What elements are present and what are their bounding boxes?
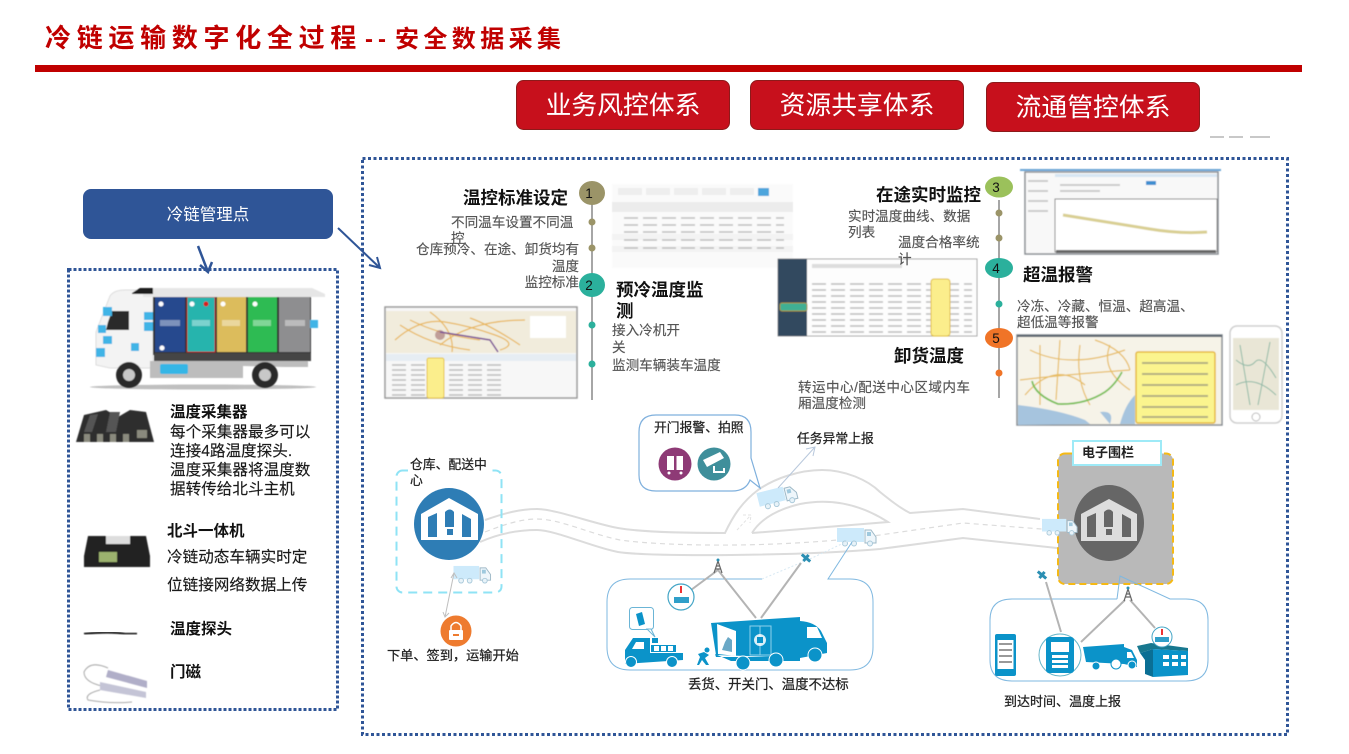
zone: electronic fence bbox=[1042, 441, 1173, 584]
step 1 text: 监控标准 bbox=[525, 275, 579, 290]
icon: truck on main road bbox=[837, 528, 876, 546]
step 3 text: 温度合格率统 bbox=[898, 234, 980, 250]
icon: pickup with phone bubble bbox=[625, 608, 683, 668]
icon: warehouse blue bbox=[414, 488, 484, 560]
text: 温度采集器: 温度采集器将温度数 bbox=[170, 461, 311, 479]
button: 资源共享体系: 资源共享体系 bbox=[780, 91, 934, 120]
button: 资源共享体系 bbox=[750, 80, 964, 130]
step 1 text: 温度 bbox=[552, 259, 579, 274]
icon: warehouse grey bbox=[1074, 485, 1144, 561]
title: -- bbox=[365, 26, 391, 53]
icon: truck arriving bbox=[1042, 519, 1077, 535]
step 3 marker: 3 bbox=[992, 180, 1000, 195]
step 3 text: 在途实时监控 bbox=[876, 185, 981, 205]
step 4 text: 冷冻、冷藏、恒温、超高温、 bbox=[1017, 298, 1194, 314]
screenshot: temperature curve bbox=[1020, 169, 1221, 254]
system buttons bbox=[516, 80, 1200, 132]
step 2 text: 测 bbox=[616, 301, 634, 321]
icon: door bbox=[658, 448, 692, 480]
refrigerated truck illustration bbox=[90, 288, 325, 390]
text: 北斗一体机: 北斗一体机 bbox=[167, 522, 245, 540]
label: warehouse: 仓库、配送中 bbox=[410, 457, 487, 472]
icon: satellite bbox=[799, 551, 813, 565]
label: callout caption: 丢货、开关门、温度不达标 bbox=[688, 676, 849, 692]
callout: door alarm bbox=[639, 415, 760, 491]
step 1 text: 温控标准设定 bbox=[463, 188, 568, 208]
text: 温度采集器: 每个采集器最多可以 bbox=[170, 423, 311, 441]
screenshot: map with temperature table bbox=[385, 307, 577, 398]
text: 温度探头: 温度探头 bbox=[170, 619, 232, 638]
timeline: steps 1-2 bbox=[579, 181, 605, 400]
icon: camera bbox=[698, 448, 730, 480]
panel: process bbox=[362, 158, 1288, 734]
icon: POS terminal bbox=[1039, 634, 1081, 676]
step 5 marker bbox=[985, 328, 1013, 348]
screenshot: route map with alarms bbox=[1017, 335, 1222, 425]
button: 冷链管理点: 冷链管理点 bbox=[167, 205, 249, 224]
text: 温度采集器 bbox=[170, 402, 311, 498]
icon: truck on branch road bbox=[756, 484, 799, 511]
step 4 text: 超温报警 bbox=[1023, 265, 1093, 285]
text: 北斗一体机: 位链接网络数据上传 bbox=[167, 575, 307, 594]
step 1 text: 不同温车设置不同温 bbox=[451, 214, 574, 230]
step 2 marker: 2 bbox=[585, 278, 593, 293]
text: 温度采集器: 据转传给北斗主机 bbox=[170, 480, 295, 498]
step 5 text: 厢温度检测 bbox=[798, 396, 866, 411]
label: electronic fence bbox=[1073, 441, 1161, 465]
text: 北斗一体机: 冷链动态车辆实时定 bbox=[167, 548, 307, 566]
icon: temperature probe bbox=[84, 632, 137, 634]
button: 业务风控体系: 业务风控体系 bbox=[546, 91, 700, 120]
title bbox=[45, 23, 565, 53]
label: electronic fence: 电子围栏 bbox=[1082, 445, 1134, 460]
icon: alarm bbox=[1152, 627, 1172, 647]
label: warehouse bbox=[408, 455, 492, 488]
step 5 marker: 5 bbox=[992, 331, 1000, 346]
arrow: to process panel bbox=[338, 228, 380, 268]
text: 门磁: 门磁 bbox=[170, 663, 202, 681]
callout: loss and door alerts bbox=[607, 540, 873, 670]
callout: door alarm: 开门报警、拍照 bbox=[654, 420, 744, 435]
button: 冷链管理点 bbox=[83, 189, 333, 239]
road network bbox=[480, 470, 1085, 555]
icon: cell tower bbox=[714, 558, 722, 573]
step 5 text bbox=[798, 346, 970, 411]
icon: person carrying box bbox=[697, 648, 710, 665]
step 5 text: 卸货温度 bbox=[894, 346, 964, 366]
text: 北斗一体机 bbox=[167, 522, 307, 594]
signal links bbox=[691, 563, 801, 618]
icon: truck at warehouse bbox=[454, 566, 491, 583]
icon: blue delivery truck bbox=[711, 617, 827, 670]
icon: depot building bbox=[1137, 643, 1188, 677]
step 3 text: 计 bbox=[898, 252, 912, 267]
icon: beidou terminal bbox=[84, 536, 150, 567]
zone: warehouse dashed box bbox=[396, 470, 502, 592]
title rule bbox=[35, 65, 1302, 72]
screenshot: temperature standard table bbox=[612, 184, 793, 268]
step 2 text bbox=[612, 280, 721, 373]
step 2 text: 接入冷机开 bbox=[612, 322, 680, 338]
step 1 text bbox=[416, 188, 579, 290]
step 1 text: 控 bbox=[451, 231, 465, 246]
arrow: down to equipment panel bbox=[198, 246, 212, 272]
step 4 marker bbox=[985, 258, 1013, 278]
step 2 text: 关 bbox=[612, 340, 626, 355]
label: exception report: 任务异常上报 bbox=[797, 431, 874, 446]
title: 冷链运输数字化全过程 bbox=[45, 23, 362, 53]
panel: equipment bbox=[68, 270, 338, 710]
step 1 marker: 1 bbox=[585, 186, 593, 201]
label: arrival caption: 到达时间、温度上报 bbox=[1004, 694, 1121, 709]
icon: door magnet bbox=[84, 665, 147, 703]
step 3 text bbox=[848, 185, 981, 267]
signal links bbox=[1046, 582, 1155, 642]
step 2 marker bbox=[579, 273, 605, 297]
step 5 text: 转运中心/配送中心区域内车 bbox=[798, 379, 970, 395]
callout: arrival report bbox=[990, 568, 1208, 681]
arrow: exception report bbox=[778, 447, 815, 488]
step 3 marker bbox=[985, 176, 1013, 198]
icon: phone with map bbox=[1230, 326, 1282, 423]
icon: small truck bbox=[1083, 644, 1137, 670]
step 1 text: 仓库预冷、在途、卸货均有 bbox=[416, 241, 579, 257]
title: 安全数据采集 bbox=[395, 26, 565, 53]
step 4 marker: 4 bbox=[992, 261, 1000, 276]
button: 业务风控体系 bbox=[516, 80, 730, 130]
step 2 text: 监测车辆装车温度 bbox=[612, 357, 721, 373]
step 4 text: 超低温等报警 bbox=[1017, 314, 1099, 330]
step 3 text: 实时温度曲线、数据 bbox=[848, 209, 971, 224]
icon: orange lock bbox=[440, 616, 472, 646]
arrow: order to truck bbox=[443, 573, 457, 617]
label: start of transport: 下单、签到，运输开始 bbox=[387, 647, 519, 663]
text: 温度采集器: 温度采集器 bbox=[170, 402, 248, 421]
screenshot: compliance table bbox=[778, 259, 977, 336]
step 2 text: 预冷温度监 bbox=[616, 280, 704, 300]
label: warehouse: 心 bbox=[410, 473, 423, 488]
step 4 text bbox=[1017, 265, 1194, 330]
icon: temperature collector bbox=[76, 410, 154, 442]
step 1 marker bbox=[579, 181, 605, 205]
icon: satellite bbox=[1035, 568, 1049, 582]
button: 流通管控体系 bbox=[986, 82, 1200, 132]
icon: alarm bbox=[668, 584, 694, 610]
icon: mobile phone bbox=[995, 634, 1016, 676]
text: 温度采集器: 连接4路温度探头. bbox=[170, 442, 292, 460]
button: 流通管控体系: 流通管控体系 bbox=[1016, 93, 1170, 122]
step 3 text: 列表 bbox=[848, 225, 876, 240]
icon: cell tower bbox=[1124, 586, 1132, 601]
timeline: steps 3-5 bbox=[985, 176, 1013, 398]
